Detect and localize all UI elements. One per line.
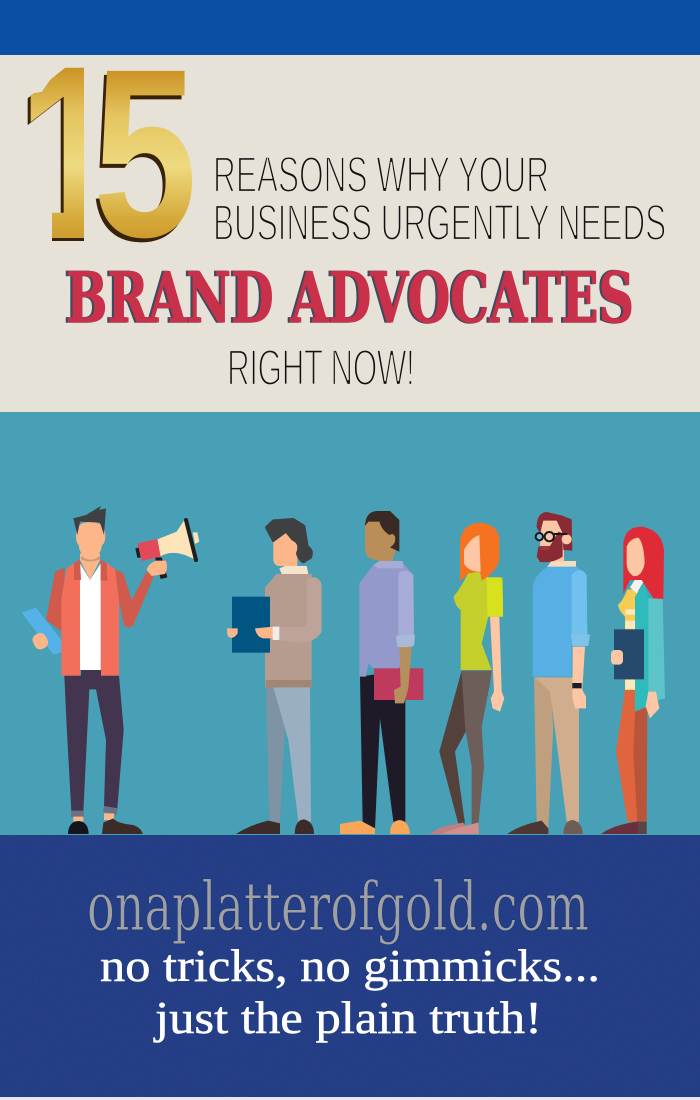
number 15 in gold: 5 <box>90 23 194 291</box>
heading line 1: REASONS WHY YOUR <box>213 146 549 203</box>
number 15 in gold: 5 <box>93 19 197 287</box>
top blue band <box>0 0 700 55</box>
tagline line 1: no tricks, no gimmicks... <box>100 940 600 991</box>
figure: woman with red hair <box>601 527 665 834</box>
right now line: RIGHT NOW! <box>227 339 415 396</box>
navy footer panel <box>0 835 700 1097</box>
header panel <box>28 68 664 384</box>
figure: woman with orange hair <box>430 523 504 834</box>
number 15 in gold: 1 <box>14 17 125 294</box>
figure: man with red folder <box>340 511 423 834</box>
tagline line 2: just the plain truth! <box>153 992 542 1043</box>
figure: bearded man with glasses <box>507 512 590 834</box>
bottom edge strip <box>0 1097 700 1100</box>
number 15 in gold <box>28 68 192 242</box>
number 15 in gold: 1 <box>17 14 128 291</box>
heading line 2: BUSINESS URGENTLY NEEDS <box>213 194 666 251</box>
figure: man with blue folder <box>227 519 322 834</box>
figure: man with megaphone <box>22 506 199 834</box>
teal illustration panel <box>0 412 700 835</box>
